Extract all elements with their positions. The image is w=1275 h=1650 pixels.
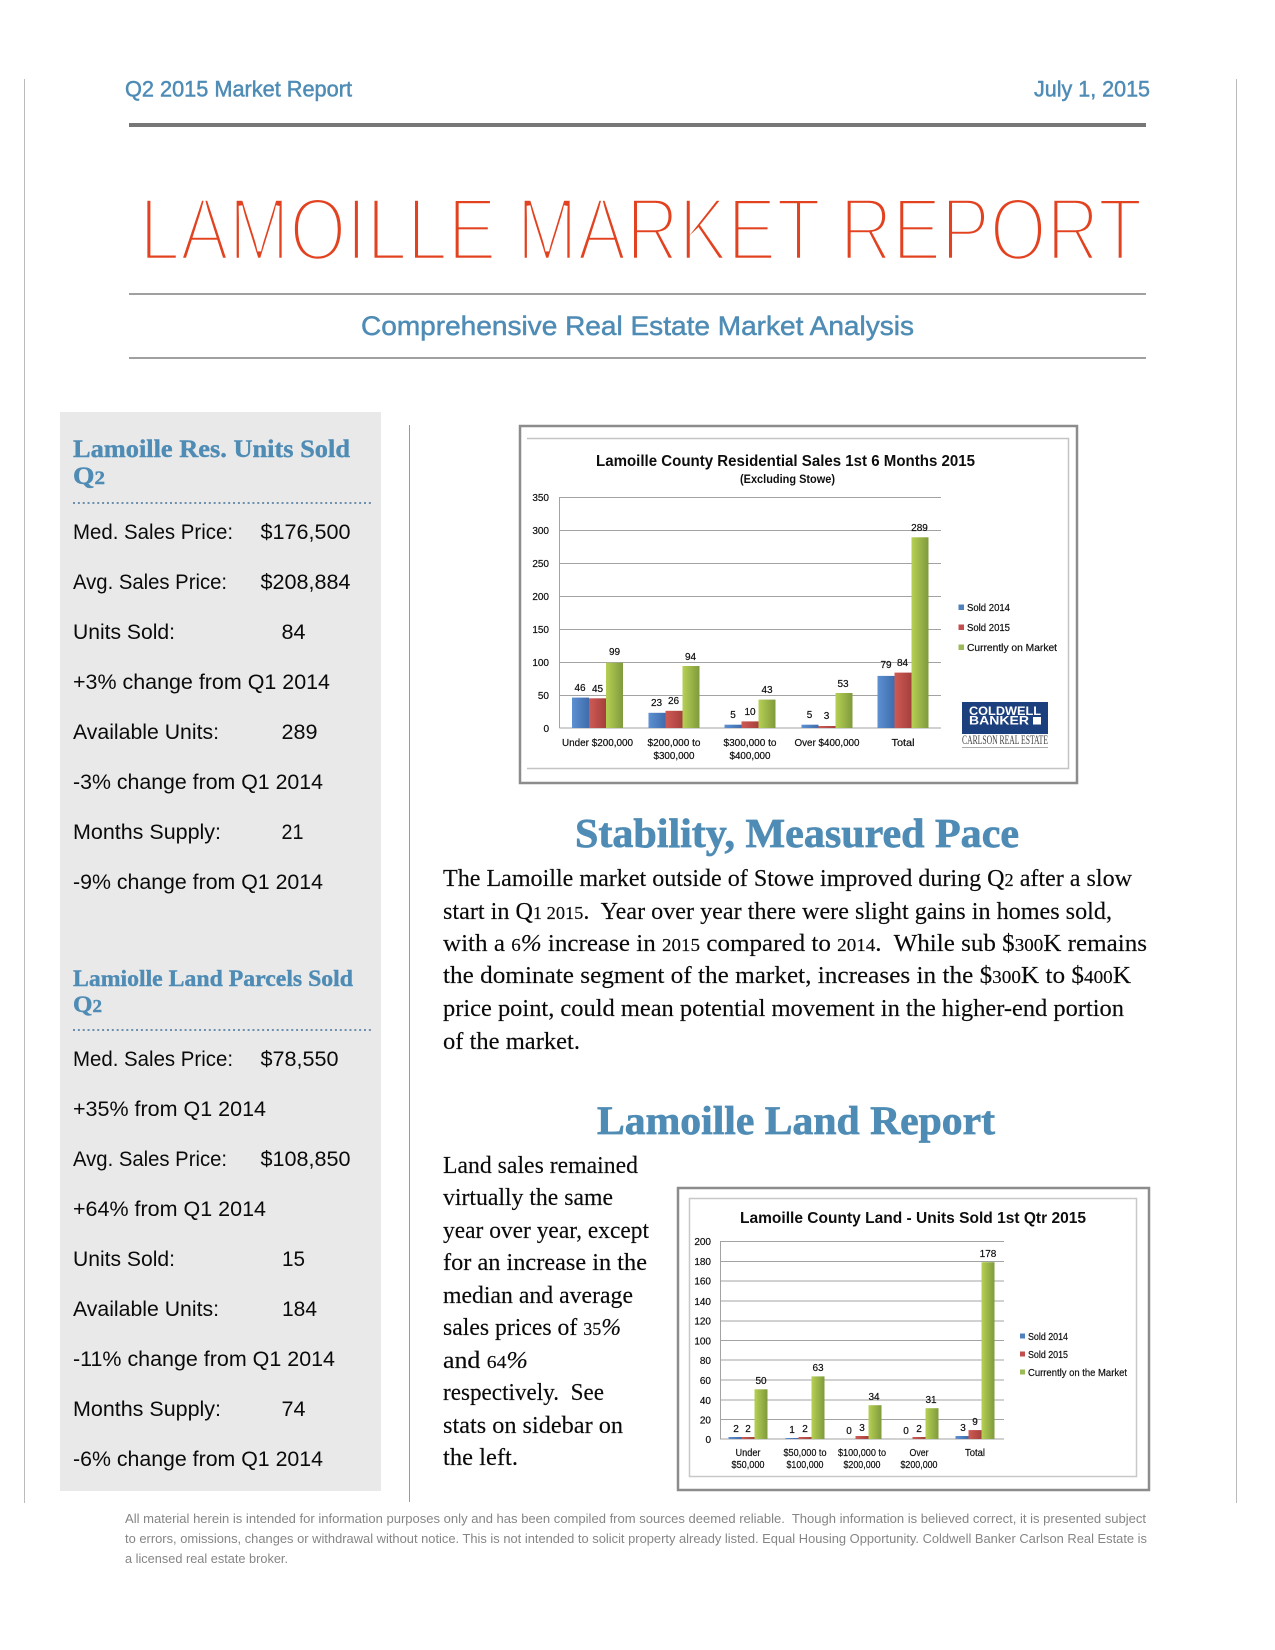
heading line two, land: Q2 [73,992,102,1018]
land stats list: 184 [282,1298,317,1321]
data labels: 23 [651,698,662,709]
land stats list [73,1048,350,1471]
text block: market summary [443,866,1147,1055]
land stats list: 15 [282,1248,305,1271]
logo: Coldwell Banker: BANKER [969,716,1030,728]
footer disclaimer: a licensed real estate broker. [125,1551,288,1566]
gridlines and y axis: 350 [532,493,549,504]
land stats list: Med. Sales Price: [73,1048,233,1071]
category labels: Total [892,738,914,749]
text block: land summary: and 64% [443,1348,528,1374]
text block: land summary: year over year, except [443,1218,649,1244]
data labels: 3 [824,711,830,722]
chart title: Lamoille County Residential Sales 1st 6 Months 2015 [596,453,975,470]
category labels: Under [736,1448,761,1459]
text block: land summary: sales prices of 35% [443,1315,621,1341]
category labels: $300,000 to [724,738,777,749]
category labels [732,1448,985,1471]
footer disclaimer: to errors, omissions, changes or withdrawal without notice. This is not intended to solicit property already listed. Equal Housing Opportunity. Coldwell Banker Carlson Real Estate is [125,1531,1147,1546]
residential stats list: +3% change from Q1 2014 [73,671,330,694]
residential stats list: Months Supply: [73,821,221,844]
data labels: 2 [802,1424,808,1435]
gridlines and y axis: 300 [532,526,549,537]
text block: land summary: respectively. See [443,1380,604,1406]
data labels: 289 [911,523,928,534]
text block: market summary: with a 6% increase in 2015 compared to 2014. While sub $ 300K remains [443,931,1147,957]
data labels: 2 [916,1424,922,1435]
data labels: 0 [846,1426,852,1437]
chart: land units sold [678,1188,1149,1490]
category labels: Total [965,1448,985,1459]
gridlines and y axis: 100 [694,1336,711,1348]
text block: market summary: The Lamoille market outside of Stowe improved during Q2 after a slow [443,866,1133,892]
land stats list: Avg. Sales Price: [73,1148,227,1171]
data labels: 63 [812,1363,824,1374]
legend: Sold 2014 [967,603,1010,614]
residential stats list: -3% change from Q1 2014 [73,771,323,794]
category labels: $200,000 [844,1460,881,1471]
residential stats list: Avg. Sales Price: [73,571,227,594]
gridlines and y axis: 20 [700,1416,711,1426]
gridlines and y axis: 50 [538,691,549,702]
gridlines and y axis: 0 [705,1435,711,1446]
text block: market summary: start in Q1 2015. Year over year there were slight gains in homes sold, [443,899,1112,925]
gridlines and y axis: 200 [694,1237,711,1248]
category labels: $200,000 to [648,738,701,749]
residential stats list: 21 [282,821,304,844]
residential stats list: 84 [282,621,306,644]
legend: Sold 2015 [1028,1350,1068,1361]
gridlines and y axis: 120 [694,1316,711,1328]
land stats list: Months Supply: [73,1398,221,1421]
chart subtitle: (Excluding Stowe) [740,472,835,486]
gridlines and y axis: 250 [532,559,549,570]
residential stats list: Med. Sales Price: [73,521,233,544]
logo: Coldwell Banker: COLDWELL [969,706,1041,718]
text block: land summary: virtually the same [443,1185,613,1211]
heading: land parcels sold: Lamiolle Land Parcels Sold [73,966,353,992]
category labels: $300,000 [654,751,695,762]
data labels: 84 [897,658,908,669]
chart: residential sales [520,426,1077,783]
gridlines and y axis: 40 [700,1396,711,1407]
legend [1020,1332,1127,1379]
data labels: 46 [574,683,586,694]
data labels: 10 [744,707,756,718]
legend: Currently on Market [967,643,1057,654]
data labels: 99 [609,647,620,658]
data labels: 31 [925,1395,937,1406]
data labels: 3 [859,1423,865,1434]
land stats list: 74 [282,1398,306,1421]
chart title: Lamoille County Land - Units Sold 1st Qtr 2015 [740,1210,1086,1227]
gridlines and y axis: 160 [694,1276,711,1288]
residential stats list: Units Sold: [73,621,175,644]
text block: market summary: of the market. [443,1029,580,1055]
data labels: 34 [868,1392,880,1403]
gridlines and y axis: 140 [694,1297,711,1308]
data labels [574,523,928,722]
category labels: Over $400,000 [794,738,860,749]
text block: market summary: the dominate segment of the market, increases in the $ 300K to $400K [443,963,1132,989]
residential stats list: -9% change from Q1 2014 [73,871,323,894]
header: date: July 1, 2015 [1034,76,1150,102]
gridlines and y axis: 0 [543,724,549,735]
text block: land summary: for an increase in the [443,1250,647,1276]
land stats list: -6% change from Q1 2014 [73,1448,323,1471]
land stats list: $108,850 [260,1148,350,1171]
data labels: 2 [745,1424,751,1435]
land stats list: $78,550 [260,1048,338,1071]
logo: Coldwell Banker [962,702,1048,748]
category labels: $50,000 [732,1460,765,1471]
data labels: 26 [668,696,679,707]
logo: Coldwell Banker: CARLSON REAL ESTATE [962,732,1048,747]
data labels: 94 [685,652,696,663]
residential stats list: $176,500 [260,521,350,544]
footer disclaimer [125,1511,1147,1566]
legend: Sold 2015 [967,623,1010,634]
gridlines and y axis: 200 [532,592,549,603]
heading: stability: Stability, Measured Pace [575,810,1019,856]
bars [572,537,928,728]
gridlines and y axis [694,1237,1004,1446]
gridlines and y axis: 150 [532,625,549,636]
category labels: $400,000 [730,751,771,762]
data labels: 1 [789,1425,795,1436]
gridlines and y axis [532,493,941,735]
land stats list: Units Sold: [73,1248,175,1271]
gridlines and y axis: 180 [694,1257,711,1268]
panel: sidebar stats [60,412,381,1491]
legend [958,603,1057,654]
data labels: 178 [980,1249,997,1260]
header: report label: Q2 2015 Market Report [125,76,352,102]
category labels: $200,000 [900,1460,938,1471]
data labels: 5 [807,710,813,721]
land stats list: +35% from Q1 2014 [73,1098,266,1121]
category labels: $100,000 to [838,1448,886,1459]
land stats list: -11% change from Q1 2014 [73,1348,335,1371]
residential stats list [73,521,351,894]
data labels [733,1249,997,1437]
data labels: 45 [592,684,603,695]
land stats list: Available Units: [73,1298,219,1321]
data labels: 3 [960,1423,966,1434]
residential stats list: 289 [282,721,318,744]
category labels: $50,000 to [784,1448,827,1459]
footer disclaimer: All material herein is intended for information purposes only and has been compiled from sources deemed reliable. Though information is believed correct, it is presented subject [125,1511,1146,1526]
gridlines and y axis: 100 [532,658,549,669]
data labels: 43 [761,685,773,696]
text block: market summary: price point, could mean potential movement in the higher-end portion [443,996,1124,1022]
heading: land report: Lamoille Land Report [597,1098,996,1143]
land stats list: +64% from Q1 2014 [73,1198,266,1221]
category labels: Over [910,1448,929,1459]
data labels: 2 [733,1424,739,1435]
residential stats list: Available Units: [73,721,219,744]
text block: land summary: median and average [443,1283,633,1309]
data labels: 53 [837,679,849,690]
category labels: Under $200,000 [562,738,633,749]
category labels [562,738,914,762]
subtitle: Comprehensive Real Estate Market Analysis [361,311,914,341]
data labels: 50 [755,1376,767,1387]
data labels: 0 [903,1426,909,1437]
residential stats list: $208,884 [260,571,351,594]
text block: land summary [443,1153,649,1471]
text block: land summary: stats on sidebar on [443,1413,623,1439]
data labels: 9 [972,1417,978,1428]
gridlines and y axis: 60 [700,1376,711,1387]
legend: Currently on the Market [1028,1368,1127,1379]
text block: land summary: the left. [443,1445,518,1471]
heading line two: Q2 [73,463,105,490]
text block: land summary: Land sales remained [443,1153,638,1179]
data labels: 5 [730,710,736,721]
legend: Sold 2014 [1028,1332,1068,1343]
data labels: 79 [880,660,892,671]
heading: residential units sold: Lamoille Res. Units Sold [73,436,350,463]
bars [728,1262,994,1439]
gridlines and y axis: 80 [700,1356,711,1367]
category labels: $100,000 [786,1460,824,1471]
